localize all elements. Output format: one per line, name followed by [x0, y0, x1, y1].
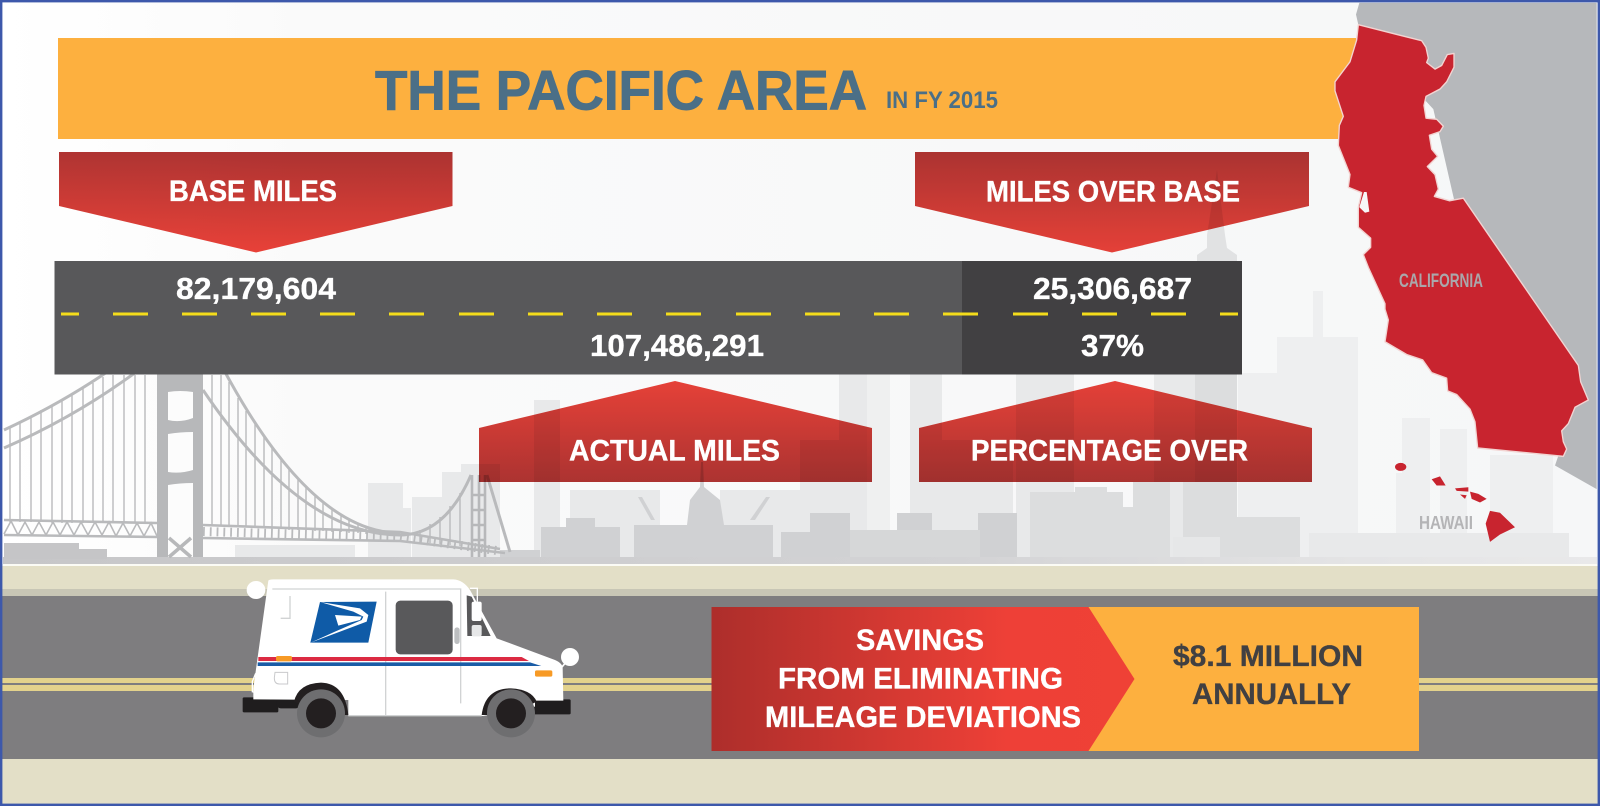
label banner: miles over base: MILES OVER BASE — [986, 176, 1240, 208]
truck rear lamp — [247, 581, 265, 599]
value: base miles: 82,179,604 — [176, 272, 336, 306]
savings amount: $8.1 MILLION — [1173, 640, 1363, 673]
truck door window — [396, 601, 453, 654]
road panel — [54, 261, 1242, 374]
bridge — [4, 372, 510, 557]
truck cab window — [467, 595, 491, 636]
label banner: actual miles — [479, 381, 872, 482]
bridge cables — [4, 372, 510, 552]
savings label: SAVINGS — [856, 624, 984, 657]
label banner: base miles: BASE MILES — [169, 175, 337, 208]
label: California: CALIFORNIA — [1399, 271, 1483, 292]
truck bumpers — [243, 697, 571, 714]
truck panel lines — [272, 589, 482, 716]
bridge deck — [4, 520, 505, 553]
truck wheel arches and wheels — [294, 683, 537, 737]
road dashes — [61, 312, 1238, 316]
savings callout — [712, 607, 1419, 751]
bridge tower far — [472, 475, 485, 557]
savings label: MILEAGE DEVIATIONS — [765, 701, 1081, 734]
truck door handle — [454, 627, 460, 644]
skyline: pyramid tower — [1197, 170, 1237, 262]
truck body — [253, 579, 563, 716]
label: Hawaii: HAWAII — [1419, 513, 1473, 533]
bridge hangers — [10, 375, 460, 546]
ground and lower road — [0, 564, 1600, 806]
savings amount: ANNUALLY — [1192, 678, 1351, 711]
map: California — [1335, 25, 1588, 456]
label banner: miles over base — [915, 152, 1309, 252]
label banner: actual miles: ACTUAL MILES — [569, 434, 780, 468]
value: actual miles: 107,486,291 — [590, 329, 764, 363]
savings label — [765, 624, 1081, 734]
panel: Nevada land — [1356, 3, 1597, 489]
label banner: percentage over: PERCENTAGE OVER — [971, 434, 1248, 468]
title banner — [58, 38, 1356, 139]
label banner: base miles — [59, 152, 452, 252]
title suffix: IN FY 2015 — [886, 87, 998, 114]
value: percentage over: 37% — [1081, 329, 1144, 363]
truck stripes — [258, 656, 552, 677]
map: Hawaii — [1395, 463, 1515, 542]
icon: USPS eagle logo — [310, 602, 377, 643]
savings amount — [1173, 640, 1363, 711]
label banner: percentage over — [919, 381, 1312, 482]
title: THE PACIFIC AREA — [375, 58, 867, 122]
truck tail light — [274, 672, 288, 684]
icon: USPS mail truck — [243, 579, 579, 737]
value: miles over base: 25,306,687 — [1033, 272, 1192, 306]
truck front lamp — [561, 648, 579, 667]
skyline — [3, 170, 1597, 565]
bridge tower near — [157, 374, 203, 557]
savings label: FROM ELIMINATING — [778, 662, 1063, 696]
